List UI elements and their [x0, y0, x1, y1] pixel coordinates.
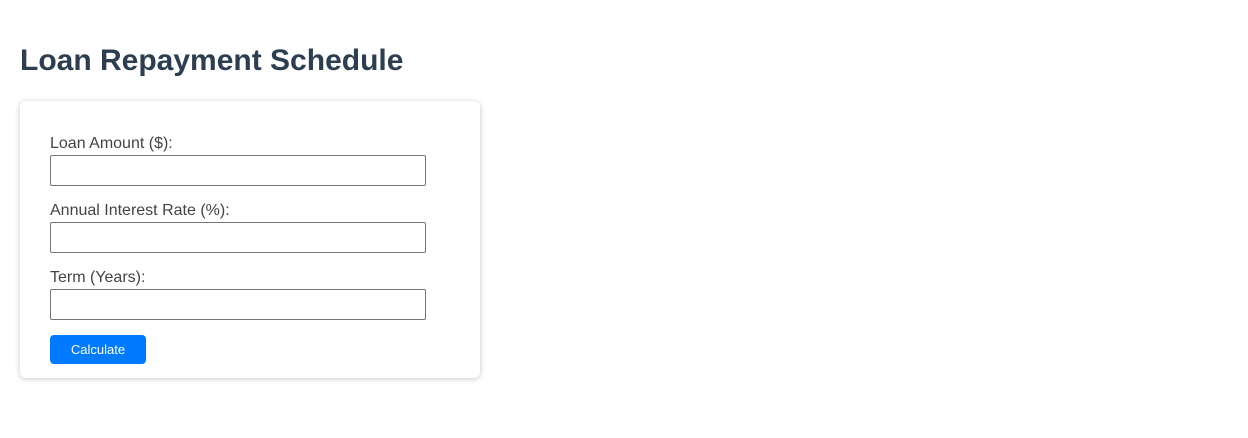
button: calculate: Calculate: [71, 342, 125, 357]
panel: loan form: [20, 101, 480, 378]
input: interest rate: [50, 222, 426, 253]
title: Loan Repayment Schedule: [20, 44, 403, 77]
label: interest rate: Annual Interest Rate (%):: [50, 202, 230, 219]
input: loan amount: [50, 155, 426, 186]
label: term: Term (Years):: [50, 269, 145, 286]
label: loan amount: Loan Amount ($):: [50, 135, 173, 152]
input: term: [50, 289, 426, 320]
button: calculate: [50, 335, 146, 364]
